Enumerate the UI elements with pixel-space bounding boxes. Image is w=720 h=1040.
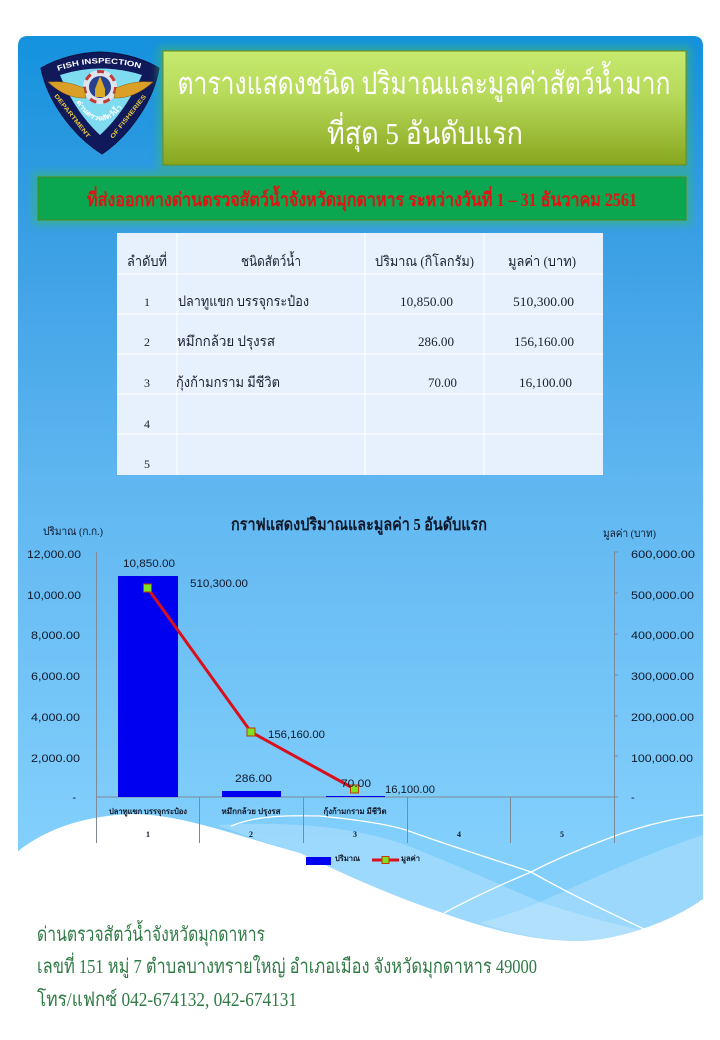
white wave	[17, 814, 704, 1040]
title banner: ที่สุด 5 อันดับแรก	[327, 112, 523, 153]
table header	[127, 251, 576, 270]
axes	[96, 552, 618, 843]
table rows	[144, 294, 574, 471]
category labels: หมึกกล้วย ปรุงรส	[222, 806, 281, 817]
data labels: 156,160.00	[268, 729, 325, 741]
line series	[144, 584, 358, 793]
category labels	[109, 806, 564, 839]
left axis labels	[27, 549, 81, 804]
table header: ลำดับที่	[127, 252, 167, 270]
footer address	[37, 920, 537, 1011]
table header: มูลค่า (บาท)	[508, 255, 576, 270]
right axis labels	[631, 549, 695, 804]
category labels: ปลาทูแขก บรรจุกระป๋อง	[109, 807, 187, 817]
data labels: 70.00	[341, 778, 371, 790]
icon: Fish Inspection shield logo: OF FISHERIES	[110, 95, 146, 138]
category labels: 1	[146, 830, 150, 839]
data labels: 510,300.00	[190, 578, 248, 590]
right axis labels: 400,000.00	[631, 630, 694, 642]
light wave bands	[217, 824, 703, 941]
legend	[306, 854, 420, 865]
table rows: หมึกกล้วย ปรุงรส	[177, 334, 275, 350]
footer address: เลขที่ 151 หมู่ 7 ตำบลบางทรายใหญ่ อำเภอเมือง จังหวัดมุกดาหาร 49000	[37, 952, 537, 979]
category labels: 5	[560, 830, 564, 839]
title banner	[158, 46, 691, 170]
legend: มูลค่า	[401, 854, 420, 864]
icon: Fish Inspection shield logo: ด่านตรวจสัตว์น้ำ	[76, 100, 122, 121]
table rows: 10,850.00	[400, 294, 453, 309]
left axis labels: 6,000.00	[31, 671, 80, 683]
table rows: 70.00	[428, 375, 457, 390]
icon: Fish Inspection shield logo: DEPARTMENT	[54, 94, 91, 137]
subtitle banner	[33, 172, 691, 225]
chart: quantity and value	[27, 515, 695, 865]
category labels: กุ้งก้ามกราม มีชีวิต	[324, 806, 386, 817]
table rows: 3	[144, 376, 150, 390]
table rows: 1	[144, 295, 150, 309]
category labels: 2	[249, 830, 253, 839]
right axis labels: 300,000.00	[631, 671, 694, 683]
left axis labels: -	[72, 792, 76, 804]
right axis labels: 600,000.00	[631, 549, 695, 561]
right axis labels: 100,000.00	[631, 753, 693, 765]
table rows: กุ้งก้ามกราม มีชีวิต	[176, 375, 280, 391]
legend: ปริมาณ	[335, 854, 361, 863]
table rows: 16,100.00	[519, 375, 572, 390]
right axis title: มูลค่า (บาท)	[603, 528, 656, 540]
left axis labels: 10,000.00	[27, 590, 81, 602]
table rows: 4	[144, 417, 150, 431]
right axis labels: 500,000.00	[631, 590, 694, 602]
bars	[118, 576, 385, 797]
table rows: 2	[144, 335, 150, 349]
table rows: ปลาทูแขก บรรจุกระป๋อง	[178, 295, 309, 310]
category labels: 4	[457, 830, 461, 839]
white wave lines	[231, 815, 703, 931]
chart title: กราฟแสดงปริมาณและมูลค่า 5 อันดับแรก	[231, 515, 487, 536]
right axis labels: 200,000.00	[631, 712, 694, 724]
footer address: ด่านตรวจสัตว์น้ำจังหวัดมุกดาหาร	[37, 920, 265, 947]
table rows: 156,160.00	[514, 334, 574, 349]
table rows: 510,300.00	[513, 294, 574, 309]
data labels: 286.00	[235, 773, 272, 785]
data labels	[123, 558, 435, 796]
left axis labels: 4,000.00	[31, 712, 80, 724]
table header: ปริมาณ (กิโลกรัม)	[375, 253, 474, 270]
footer address: โทร/แฟกซ์ 042-674132, 042-674131	[37, 988, 297, 1011]
table header: ชนิดสัตว์น้ำ	[241, 251, 301, 270]
left axis labels: 8,000.00	[31, 630, 80, 642]
table rows: 5	[144, 457, 150, 471]
left axis labels: 2,000.00	[31, 753, 80, 765]
right axis labels: -	[631, 792, 635, 804]
subtitle banner: ที่ส่งออกทางด่านตรวจสัตว์น้ำจังหวัดมุกดาหาร ระหว่างวันที่ 1 – 31 ธันวาคม 2561	[87, 185, 637, 212]
left axis labels: 12,000.00	[27, 549, 81, 561]
category labels: 3	[353, 830, 357, 839]
icon: Fish Inspection shield logo: FISH INSPECTION	[57, 58, 142, 71]
left axis title: ปริมาณ (ก.ก.)	[43, 526, 103, 538]
data labels: 16,100.00	[385, 784, 435, 796]
data table	[117, 233, 603, 475]
data labels: 10,850.00	[123, 558, 175, 570]
table rows: 286.00	[418, 334, 454, 349]
icon: Fish Inspection shield logo	[40, 52, 160, 154]
